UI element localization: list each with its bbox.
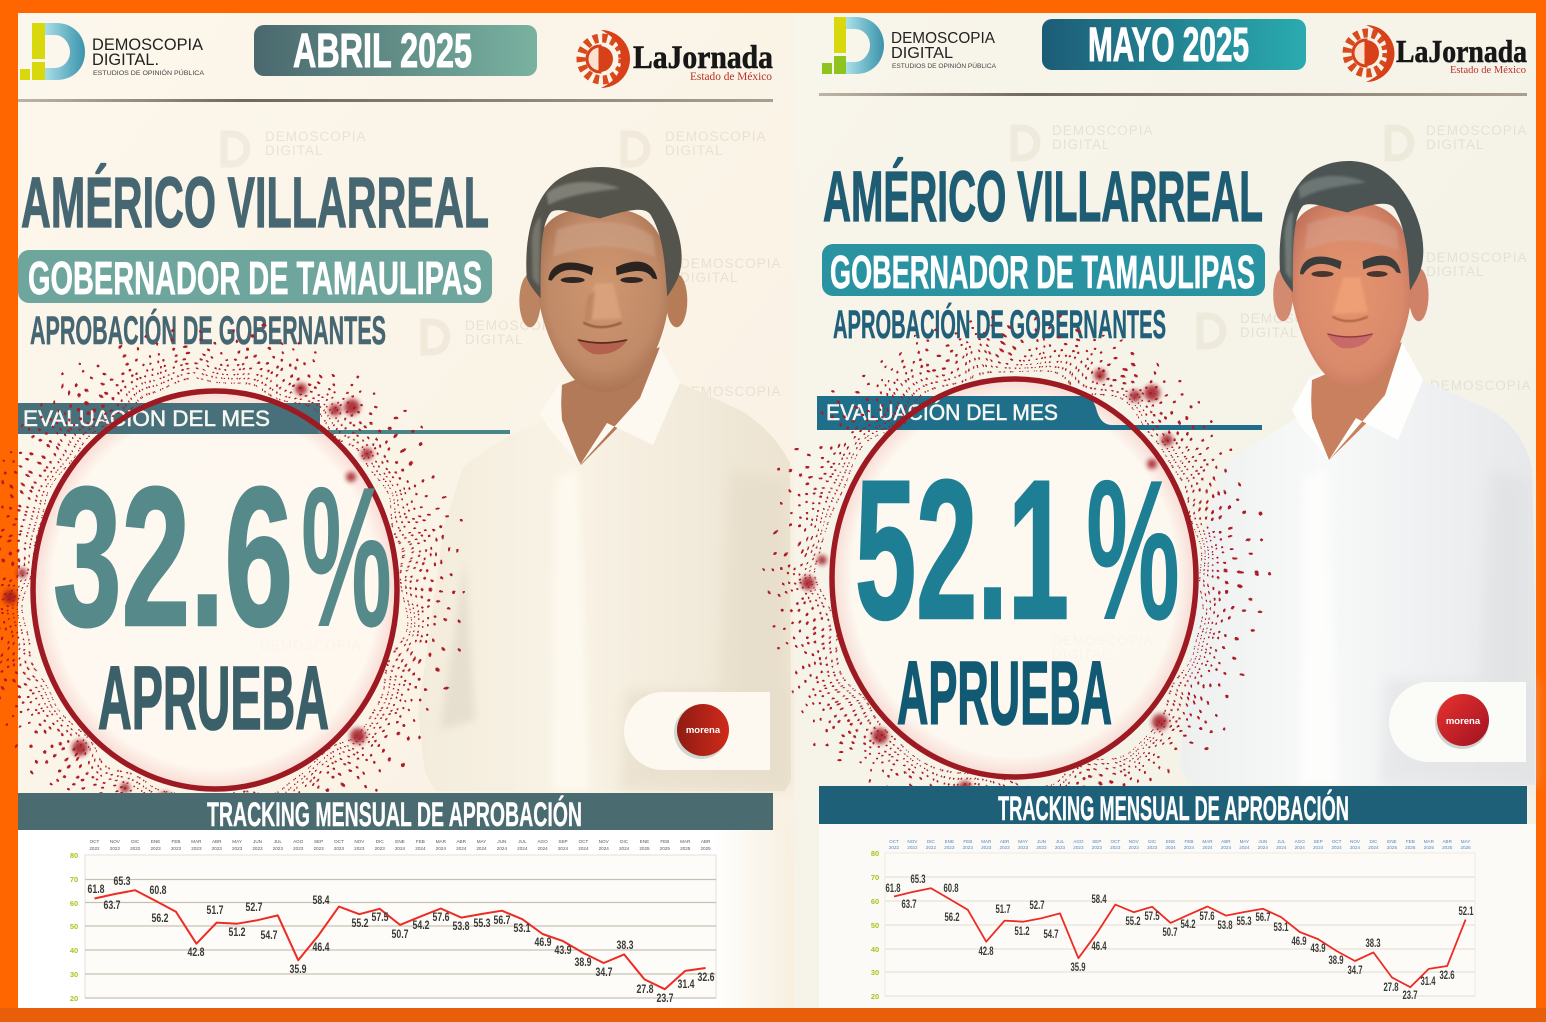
watermarks: abril: DEMOSCOPIA <box>265 129 367 144</box>
y axis labels: 70 <box>871 873 879 882</box>
person photo: mayo <box>1180 161 1535 785</box>
month labels: 2023 <box>1018 845 1029 850</box>
data labels: 38.9 <box>1328 955 1344 967</box>
panel: abril 2025 <box>0 13 795 1008</box>
y axis labels: 30 <box>871 968 879 977</box>
data labels: 35.9 <box>290 964 306 976</box>
month labels: OCT <box>889 839 899 844</box>
data labels: 23.7 <box>1402 990 1418 1002</box>
month labels: 2025 <box>660 846 670 851</box>
y axis labels: 20 <box>871 992 879 1001</box>
month labels: FEB <box>172 839 180 844</box>
month labels: SEP <box>314 839 323 844</box>
month labels: 2025 <box>1387 845 1397 850</box>
y axis labels: 20 <box>70 994 78 1003</box>
percentage: 52.1%: 52.1 <box>855 439 1069 660</box>
month labels: ABR <box>701 839 711 844</box>
month labels: DIC <box>131 839 140 844</box>
data labels: 27.8 <box>636 984 654 996</box>
data labels: 46.9 <box>1292 936 1306 948</box>
month labels: 2025 <box>1424 845 1434 850</box>
tracking heading band <box>18 793 773 834</box>
month labels: AGO <box>1295 839 1305 844</box>
data labels: 46.9 <box>534 937 552 949</box>
data labels: 51.7 <box>206 905 224 917</box>
month labels: MAR <box>1202 839 1213 844</box>
logo: demoscopia digital <box>20 23 205 80</box>
watermarks: mayo: DIGITAL <box>1052 137 1111 152</box>
month labels: MAR <box>981 839 992 844</box>
chart area <box>85 855 716 998</box>
logo: demoscopia digital: ESTUDIOS DE OPINIÓN PÚBLICA <box>892 61 997 70</box>
data labels: 54.2 <box>412 920 430 932</box>
data labels: 43.9 <box>554 945 572 957</box>
red speckles: abril <box>0 326 463 854</box>
month labels: ENE <box>1166 839 1175 844</box>
watermarks: mayo: DEMOSCOPIA <box>1240 311 1342 326</box>
month labels: ABR <box>1221 839 1231 844</box>
logo: la jornada: LaJornada <box>1396 33 1527 69</box>
data labels: 63.7 <box>104 900 120 912</box>
data labels: 51.7 <box>996 904 1010 916</box>
data labels: 50.7 <box>392 929 408 941</box>
date pill: mayo 2025: MAYO 2025 <box>1088 19 1249 72</box>
month labels: DIC <box>620 839 629 844</box>
watermarks: mayo: DEMOSCOPIA <box>1426 250 1528 265</box>
month labels: NOV <box>1350 839 1361 844</box>
evaluación band <box>18 403 510 434</box>
month labels: 2023 <box>354 846 365 851</box>
month labels: 2025 <box>680 846 691 851</box>
month labels: ENE <box>640 839 649 844</box>
approval disc: mayo <box>833 380 1195 776</box>
month labels: NOV <box>354 839 365 844</box>
data labels: 63.7 <box>902 899 916 911</box>
month labels: 2023 <box>944 845 955 850</box>
month labels: 2023 <box>171 846 182 851</box>
month labels: 2022 <box>907 845 918 850</box>
data labels: 56.2 <box>944 912 960 924</box>
role pill: gobernador: GOBERNADOR DE TAMAULIPAS <box>28 252 482 304</box>
approval circle: abril <box>3 383 397 806</box>
tracking heading band <box>819 786 1527 828</box>
role pill: gobernador <box>18 250 492 304</box>
month labels: OCT <box>579 839 588 844</box>
date pill: abril 2025: ABRIL 2025 <box>293 25 472 78</box>
month labels: JUL <box>1056 839 1065 844</box>
month labels: DIC <box>376 839 384 844</box>
y axis labels: 40 <box>871 945 879 954</box>
month labels: 2024 <box>599 846 609 851</box>
month labels: MAY <box>1018 839 1028 844</box>
logo: la jornada <box>1347 25 1527 82</box>
month labels: OCT <box>1332 839 1342 844</box>
data labels: 46.4 <box>1092 941 1107 953</box>
month labels: 2024 <box>1313 845 1324 850</box>
panel: mayo 2025: APRUEBA <box>897 644 1112 744</box>
y axis labels: 60 <box>871 897 879 906</box>
logo: demoscopia digital: ESTUDIOS DE OPINIÓN PÚBLICA <box>93 68 205 77</box>
panel: mayo 2025 <box>766 13 1536 1008</box>
month labels: 2025 <box>1460 845 1471 850</box>
data labels: 54.7 <box>1044 929 1058 941</box>
month labels: 2023 <box>375 846 385 851</box>
percentage: 32.6%: % <box>301 446 392 669</box>
data labels: 53.1 <box>514 923 531 935</box>
month labels: ENE <box>945 839 954 844</box>
month labels: 2023 <box>273 846 283 851</box>
month labels: MAR <box>191 839 202 844</box>
watermarks: abril: DIGITAL <box>680 270 739 285</box>
month labels: 2024 <box>476 846 487 851</box>
header rule <box>819 93 1527 96</box>
month labels: 2024 <box>456 846 467 851</box>
data labels: 50.7 <box>1162 927 1178 939</box>
data labels: 38.3 <box>1366 938 1380 950</box>
data labels: 53.8 <box>1218 920 1233 932</box>
y axis labels <box>70 851 78 1003</box>
evaluación band: EVALUACIÓN DEL MES <box>826 400 1058 425</box>
month labels: 2022 <box>110 846 120 851</box>
tracking chart: abril <box>18 793 791 1008</box>
month labels: MAY <box>1240 839 1249 844</box>
month labels: 2023 <box>150 846 161 851</box>
logo: la jornada: LaJornada <box>633 40 773 76</box>
month labels: 2023 <box>293 846 304 851</box>
month labels: JUL <box>274 839 282 844</box>
month labels: AGO <box>1073 839 1084 844</box>
data labels: 51.2 <box>1014 926 1030 938</box>
chart background <box>819 824 1536 1008</box>
month labels: ENE <box>1387 839 1397 844</box>
data labels: 61.8 <box>88 884 105 896</box>
month labels: 2024 <box>1239 845 1250 850</box>
logo: demoscopia digital: DIGITAL <box>891 45 953 62</box>
month labels: ABR <box>212 839 222 844</box>
month labels: MAR <box>680 839 691 844</box>
role pill: gobernador <box>822 244 1265 298</box>
party badge: morena <box>624 692 770 770</box>
month labels: MAR <box>1424 839 1435 844</box>
logo: demoscopia digital: DEMOSCOPIA <box>92 36 203 54</box>
watermarks: abril: DIGITAL <box>465 332 524 347</box>
month labels: ABR <box>1000 839 1010 844</box>
chart area <box>885 853 1475 996</box>
data labels <box>886 874 1474 1002</box>
watermarks: abril: DIGITAL <box>265 143 324 158</box>
month labels: 2023 <box>999 845 1010 850</box>
month labels: SEP <box>558 839 568 844</box>
month labels: DIC <box>927 839 936 844</box>
month labels: 2022 <box>89 846 100 851</box>
month labels: ENE <box>395 839 405 844</box>
data labels: 65.3 <box>114 876 130 888</box>
watermarks: mayo: DIGITAL <box>1240 325 1299 340</box>
chart background <box>18 830 791 1008</box>
month labels: NOV <box>599 839 610 844</box>
month labels: MAY <box>232 839 242 844</box>
data labels <box>88 876 714 1005</box>
month labels: DIC <box>1369 839 1378 844</box>
month labels: 2023 <box>252 846 263 851</box>
month labels: OCT <box>1110 839 1120 844</box>
month labels: JUL <box>518 839 527 844</box>
subtitle: APROBACIÓN DE GOBERNANTES <box>833 301 1166 347</box>
watermarks: mayo: DEMOSCOPIA <box>1052 633 1154 648</box>
data labels: 52.7 <box>246 902 262 914</box>
watermarks: abril: DEMOSCOPIA <box>665 129 767 144</box>
month labels: 2023 <box>313 846 324 851</box>
data labels: 65.3 <box>910 874 926 886</box>
month labels <box>89 839 711 851</box>
month labels: 2024 <box>1276 845 1287 850</box>
data labels: 42.8 <box>188 947 205 959</box>
subtitle: APROBACIÓN DE GOBERNANTES <box>30 307 386 353</box>
month labels: NOV <box>110 839 121 844</box>
month labels: FEB <box>1406 839 1415 844</box>
month labels: JUN <box>1037 839 1046 844</box>
month labels: 2024 <box>1221 845 1231 850</box>
month labels: FEB <box>660 839 669 844</box>
month labels: 2023 <box>334 846 344 851</box>
month labels: 2025 <box>1405 845 1416 850</box>
month labels: 2024 <box>1350 845 1361 850</box>
title: américo villarreal: AMÉRICO VILLARREAL <box>21 164 489 243</box>
party badge: morena: morena <box>686 725 721 736</box>
data labels: 32.6 <box>1440 970 1454 982</box>
data labels: 46.4 <box>312 942 330 954</box>
watermarks: abril: DEMOSCOPIA <box>260 638 362 653</box>
month labels: OCT <box>90 839 100 844</box>
month labels: 2025 <box>700 846 711 851</box>
y axis labels: 50 <box>871 921 879 930</box>
month labels: 2023 <box>1036 845 1047 850</box>
data labels: 38.3 <box>616 940 634 952</box>
month labels: 2023 <box>1092 845 1102 850</box>
data labels: 35.9 <box>1070 962 1086 974</box>
logo: demoscopia digital <box>822 17 997 74</box>
y axis labels: 60 <box>70 899 78 908</box>
month labels: MAY <box>477 839 486 844</box>
data labels: 56.2 <box>152 913 168 925</box>
month labels <box>889 839 1471 850</box>
data labels: 55.2 <box>1126 916 1140 928</box>
month labels: 2023 <box>1129 845 1139 850</box>
y axis labels: 50 <box>70 922 78 931</box>
bottom frame band <box>0 1008 1546 1022</box>
month labels: 2024 <box>1258 845 1268 850</box>
month labels: 2023 <box>963 845 973 850</box>
y axis labels: 30 <box>70 970 78 979</box>
data labels: 55.3 <box>1236 916 1252 928</box>
party badge: morena <box>1389 682 1526 762</box>
data labels: 57.5 <box>1144 911 1160 923</box>
month labels: 2024 <box>436 846 446 851</box>
watermarks: mayo <box>1014 123 1532 662</box>
month labels: FEB <box>416 839 425 844</box>
month labels: 2023 <box>1110 845 1121 850</box>
month labels: JUN <box>253 839 262 844</box>
watermarks: mayo: DIGITAL <box>1426 264 1485 279</box>
month labels: 2024 <box>537 846 548 851</box>
month labels: 2023 <box>1073 845 1084 850</box>
evaluación band: EVALUACIÓN DEL MES <box>23 406 270 431</box>
watermarks: mayo: DEMOSCOPIA <box>1426 123 1528 138</box>
approval line <box>94 890 706 989</box>
month labels: JUN <box>497 839 506 844</box>
data labels: 55.3 <box>474 918 490 930</box>
month labels: NOV <box>907 839 918 844</box>
data labels: 58.4 <box>312 895 330 907</box>
data labels: 32.6 <box>698 972 714 984</box>
panel background: abril <box>18 13 795 1008</box>
month labels: DIC <box>1148 839 1157 844</box>
data labels: 53.1 <box>1274 922 1289 934</box>
month labels: 2024 <box>619 846 630 851</box>
month labels: 2022 <box>926 845 936 850</box>
month labels: 2024 <box>1331 845 1342 850</box>
month labels: 2023 <box>191 846 202 851</box>
party badge: morena: morena <box>1446 716 1481 727</box>
evaluación band <box>817 396 1262 430</box>
month labels: ABR <box>456 839 467 844</box>
data labels: 38.9 <box>574 957 592 969</box>
red speckles: mayo <box>766 314 1262 842</box>
label: aprueba: APRUEBA <box>98 649 329 749</box>
y axis labels: 80 <box>871 849 879 858</box>
data labels: 53.8 <box>452 921 470 933</box>
data labels: 57.5 <box>372 912 389 924</box>
data labels: 34.7 <box>1348 965 1362 977</box>
month labels: 2024 <box>1184 845 1195 850</box>
data labels: 23.7 <box>656 993 674 1005</box>
month labels: NOV <box>1129 839 1140 844</box>
month labels: 2024 <box>497 846 507 851</box>
month labels: 2025 <box>1442 845 1453 850</box>
y axis labels: 80 <box>70 851 78 860</box>
data labels: 60.8 <box>944 883 959 895</box>
month labels: 2023 <box>981 845 992 850</box>
month labels: 2022 <box>889 845 900 850</box>
logo: demoscopia digital: DIGITAL. <box>92 51 159 69</box>
logo: la jornada <box>581 30 773 88</box>
month labels: 2024 <box>578 846 589 851</box>
data labels: 31.4 <box>678 979 695 991</box>
data labels: 52.7 <box>1030 900 1044 912</box>
y axis labels: 40 <box>70 946 78 955</box>
data labels: 54.7 <box>260 930 278 942</box>
person photo: abril <box>418 167 791 791</box>
month labels: SEP <box>1313 839 1323 844</box>
tracking heading band: TRACKING MENSUAL DE APROBACIÓN <box>207 796 582 834</box>
header rule <box>18 99 773 102</box>
data labels: 54.2 <box>1180 919 1196 931</box>
month labels: 2024 <box>1165 845 1176 850</box>
data labels: 55.2 <box>352 918 368 930</box>
data labels: 27.8 <box>1384 982 1399 994</box>
logo: la jornada: Estado de México <box>1450 64 1526 76</box>
month labels: AGO <box>293 839 304 844</box>
watermarks: abril <box>224 129 782 653</box>
month labels: ABR <box>1442 839 1453 844</box>
role pill: gobernador: GOBERNADOR DE TAMAULIPAS <box>830 246 1255 298</box>
watermarks: mayo: DEMOSCOPIA <box>1430 378 1532 393</box>
data labels: 57.6 <box>432 912 450 924</box>
month labels: 2022 <box>130 846 141 851</box>
month labels: 2024 <box>558 846 569 851</box>
watermarks: abril: DIGITAL <box>665 143 724 158</box>
data labels: 60.8 <box>150 885 167 897</box>
month labels: MAR <box>436 839 447 844</box>
month labels: 2023 <box>212 846 222 851</box>
month labels: 2024 <box>395 846 406 851</box>
month labels: 2023 <box>1055 845 1066 850</box>
data labels: 61.8 <box>886 883 901 895</box>
percentage: 52.1%: % <box>1086 439 1180 662</box>
approval disc: abril <box>34 392 396 788</box>
month labels: SEP <box>1092 839 1101 844</box>
panel background: mayo <box>795 13 1536 1008</box>
data labels: 56.7 <box>1256 912 1270 924</box>
approval line <box>894 888 1466 987</box>
month labels: MAY <box>1461 839 1470 844</box>
watermarks: abril: DEMOSCOPIA <box>680 384 782 399</box>
data labels: 51.2 <box>228 927 246 939</box>
month labels: 2024 <box>1368 845 1379 850</box>
percentage: 32.6%: 32.6 <box>53 446 293 667</box>
watermarks: mayo: DIGITAL <box>1426 137 1485 152</box>
data labels: 43.9 <box>1310 943 1326 955</box>
month labels: JUN <box>1258 839 1267 844</box>
month labels: JUL <box>1277 839 1286 844</box>
data labels: 57.6 <box>1200 911 1214 923</box>
month labels: 2025 <box>639 846 650 851</box>
month labels: 2024 <box>415 846 426 851</box>
tracking chart: mayo <box>819 786 1536 1008</box>
month labels: 2023 <box>232 846 243 851</box>
month labels: ENE <box>151 839 160 844</box>
y axis labels <box>871 849 879 1001</box>
watermarks: abril: DEMOSCOPIA <box>680 256 782 271</box>
month labels: FEB <box>963 839 972 844</box>
data labels: 52.1 <box>1458 906 1474 918</box>
month labels: 2024 <box>517 846 528 851</box>
month labels: 2023 <box>1147 845 1158 850</box>
month labels: AGO <box>537 839 548 844</box>
data labels: 56.7 <box>494 915 510 927</box>
watermarks: mayo: DEMOSCOPIA <box>1052 123 1154 138</box>
month labels: FEB <box>1185 839 1193 844</box>
data labels: 31.4 <box>1420 976 1436 988</box>
logo: la jornada: Estado de México <box>690 71 772 83</box>
logo: demoscopia digital: DEMOSCOPIA <box>891 30 995 47</box>
month labels: 2024 <box>1202 845 1213 850</box>
month labels: 2024 <box>1295 845 1305 850</box>
watermarks: mayo: DIGITAL <box>1052 647 1111 662</box>
watermarks: abril: DEMOSCOPIA <box>465 318 567 333</box>
data labels: 42.8 <box>978 946 994 958</box>
data labels: 58.4 <box>1092 894 1107 906</box>
month labels: OCT <box>334 839 344 844</box>
approval circle: mayo <box>801 369 1196 795</box>
y axis labels: 70 <box>70 875 78 884</box>
data labels: 34.7 <box>596 967 612 979</box>
